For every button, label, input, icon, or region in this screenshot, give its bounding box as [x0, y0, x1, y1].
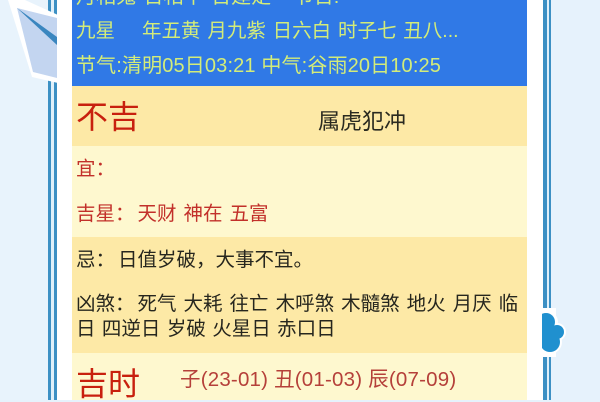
zodiac clash: 属虎犯冲 — [318, 109, 406, 134]
panel: inauspicious — [72, 237, 527, 353]
icon: paper plane — [8, 0, 57, 83]
header row: solar terms: 节气:清明05日03:21 中气:谷雨20日10:25 — [76, 55, 441, 77]
panel: lucky hours — [72, 353, 527, 400]
evil stars: 凶煞：死气 大耗 往亡 木呼煞 木髓煞 地火 月厌 临 — [76, 293, 518, 315]
header row: nine stars: 九星 年五黄 月九紫 日六白 时子七 丑八... — [76, 20, 459, 42]
icon: blue flower — [542, 308, 566, 357]
lucky hours heading: 吉时 — [76, 366, 140, 402]
panel: calendar header — [72, 0, 527, 86]
panel: inauspicious: 日 四逆日 岁破 火星日 赤口日 — [76, 318, 336, 340]
avoid text: 忌：日值岁破，大事不宜。 — [76, 249, 313, 271]
panel: verdict — [72, 86, 527, 146]
lucky hours list: 子(23-01) 丑(01-03) 辰(07-09) — [180, 368, 456, 391]
lucky stars: 吉星：天财 神在 五富 — [76, 203, 269, 225]
verdict heading: 不吉 — [76, 99, 140, 135]
suitable label: 宜： — [76, 158, 115, 180]
panel: auspicious — [72, 146, 527, 237]
